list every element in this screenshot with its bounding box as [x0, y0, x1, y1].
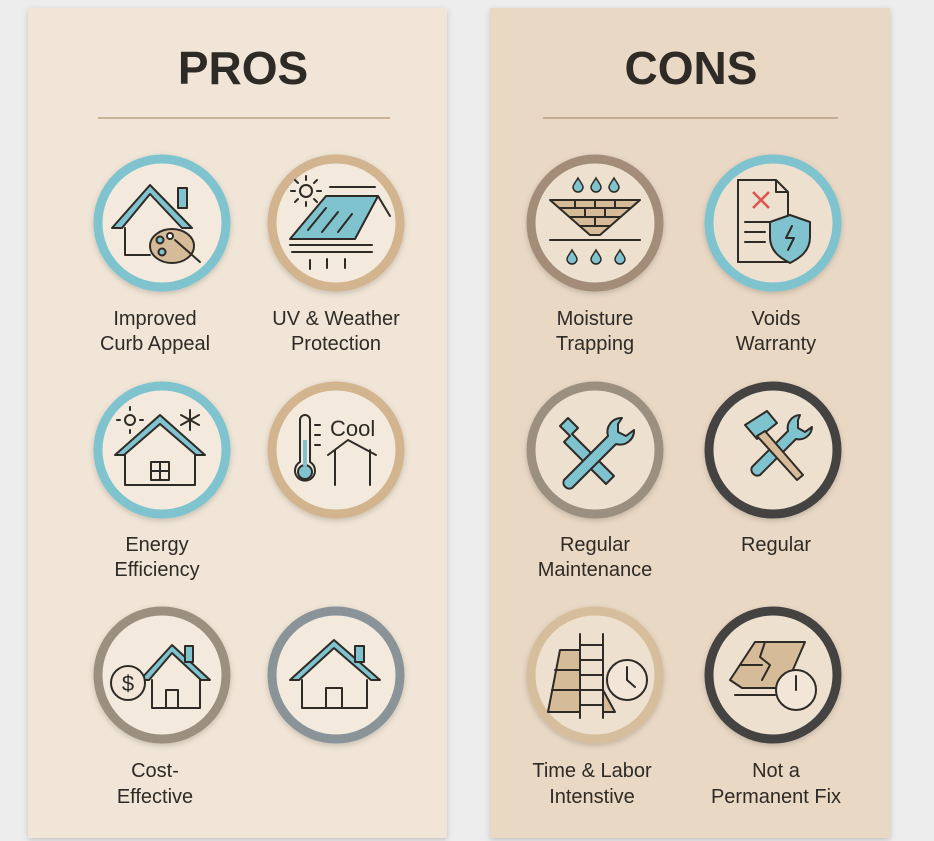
icon: energy efficiency — [98, 386, 226, 514]
label: cost effective: Cost- — [131, 760, 179, 782]
icon: time labor — [531, 611, 659, 739]
label: not permanent fix: Permanent Fix — [711, 786, 841, 808]
icon: not permanent fix — [709, 611, 837, 739]
title: pros: PROS — [178, 42, 308, 94]
label: moisture trapping: Moisture — [557, 308, 633, 330]
label: uv weather protection: UV & Weather — [272, 308, 400, 330]
label: time labor: Time & Labor — [532, 760, 652, 782]
icon: cost effective: $ — [122, 671, 134, 696]
icon: regular maintenance — [531, 386, 659, 514]
label: regular maintenance: Maintenance — [538, 559, 652, 581]
icon: moisture trapping — [531, 159, 659, 287]
label: regular: Regular — [741, 534, 811, 556]
label: regular maintenance: Regular — [560, 534, 630, 556]
icon: voids warranty — [709, 159, 837, 287]
icon: cool: Cool — [330, 416, 375, 441]
icon: house — [272, 611, 400, 739]
label: time labor: Intenstive — [549, 786, 635, 808]
icon: cool — [272, 386, 400, 514]
label: uv weather protection: Protection — [291, 333, 381, 355]
label: energy efficiency: Energy — [125, 534, 189, 556]
label: cost effective: Effective — [117, 786, 193, 808]
icon: improved curb appeal — [98, 159, 226, 287]
panel: cons — [490, 8, 890, 838]
label: not permanent fix: Not a — [752, 760, 800, 782]
icon: brush and wrench — [709, 386, 837, 514]
icon: cost effective — [98, 611, 226, 739]
label: energy efficiency: Efficiency — [114, 559, 200, 581]
label: voids warranty: Warranty — [736, 333, 816, 355]
title: cons: CONS — [625, 42, 757, 94]
label: moisture trapping: Trapping — [556, 333, 634, 355]
icon: uv weather protection — [272, 159, 400, 287]
panel: pros — [28, 8, 447, 838]
label: voids warranty: Voids — [752, 308, 800, 330]
label: improved curb appeal: Curb Appeal — [100, 333, 210, 355]
label: improved curb appeal: Improved — [113, 308, 197, 330]
